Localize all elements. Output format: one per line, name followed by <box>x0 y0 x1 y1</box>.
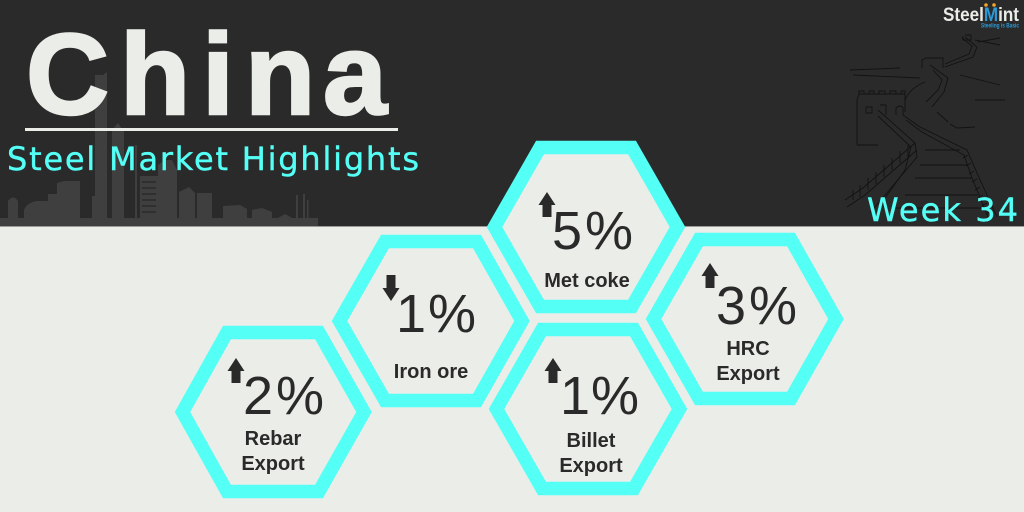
label: HRC <box>726 338 770 360</box>
panel: Met coke hexagon <box>494 148 678 306</box>
icon: up arrow <box>538 192 556 217</box>
value 3%: 3% <box>716 276 797 336</box>
value 1%: 1% <box>396 284 476 344</box>
panel: Billet Export hexagon <box>496 330 680 488</box>
label: Export <box>241 453 305 475</box>
label: Billet <box>567 430 616 452</box>
panel: Rebar Export hexagon <box>182 332 364 492</box>
icon: down arrow <box>382 275 400 301</box>
panel: Iron ore hexagon <box>340 242 522 400</box>
label: Rebar <box>245 428 302 450</box>
great wall line drawing <box>845 35 1005 217</box>
icon: up arrow <box>228 358 244 383</box>
icon: up arrow <box>702 263 718 288</box>
week label: Week 34 <box>867 191 1018 229</box>
dark header band <box>0 0 1024 226</box>
subtitle: Steel Market Highlights: Steel Market Highlights <box>7 140 419 178</box>
label: Export <box>559 455 623 477</box>
label: Met coke <box>544 270 630 292</box>
icon: up arrow <box>544 358 562 383</box>
title: China: China <box>26 11 388 139</box>
label: Iron ore <box>394 361 468 383</box>
panel: HRC Export hexagon <box>654 240 836 398</box>
value 5%: 5% <box>552 201 633 261</box>
label: Export <box>716 363 780 385</box>
title underline <box>25 128 398 131</box>
value 1%: 1% <box>560 366 639 426</box>
logo: SteelMint: SteelMint <box>943 5 1020 26</box>
value 2%: 2% <box>243 366 324 426</box>
city skyline silhouette <box>0 72 318 226</box>
